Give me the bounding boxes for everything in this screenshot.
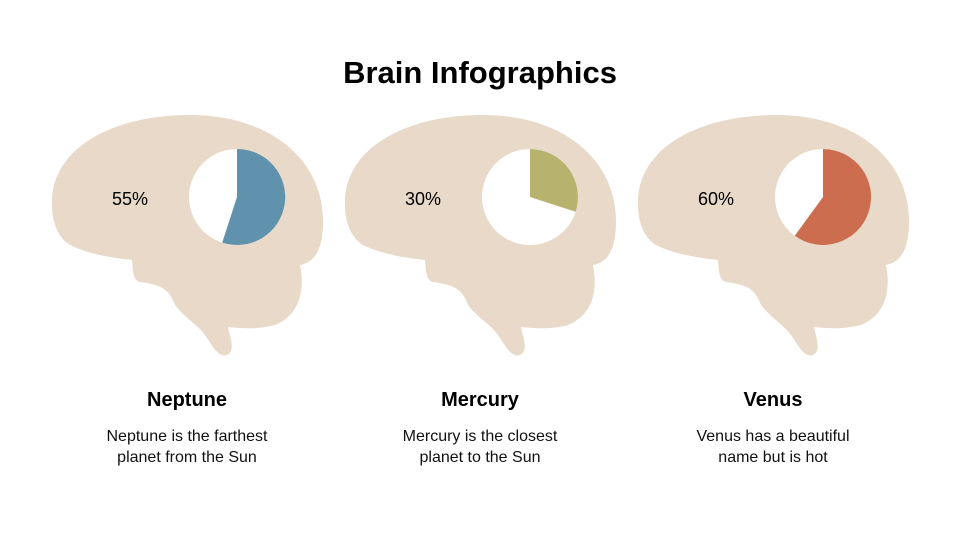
panel: Neptune <box>52 115 323 466</box>
heading Neptune: Neptune <box>147 389 227 411</box>
pie chart Neptune 55% <box>189 149 285 245</box>
panel: Mercury <box>345 115 616 466</box>
text Neptune: Neptune is the farthest <box>107 428 268 445</box>
heading Venus: Venus <box>744 389 802 411</box>
text Venus: name but is hot <box>718 449 828 466</box>
percentage Venus: 60% <box>698 189 734 209</box>
percentage Mercury: 30% <box>405 189 441 209</box>
panel: Venus <box>638 115 909 466</box>
text Neptune: planet from the Sun <box>117 449 257 466</box>
icon: brain Neptune <box>52 115 323 355</box>
percentage Neptune: 55% <box>112 189 148 209</box>
title: Brain Infographics <box>343 55 617 90</box>
pie chart Venus 60% <box>775 149 871 245</box>
text Mercury: Mercury is the closest <box>403 428 558 445</box>
pie chart Mercury 30% <box>482 149 578 245</box>
icon: brain Mercury <box>345 115 616 355</box>
icon: brain Venus <box>638 115 909 355</box>
text Venus: Venus has a beautiful <box>696 428 850 445</box>
text Mercury: planet to the Sun <box>420 449 540 466</box>
heading Mercury: Mercury <box>441 389 520 411</box>
